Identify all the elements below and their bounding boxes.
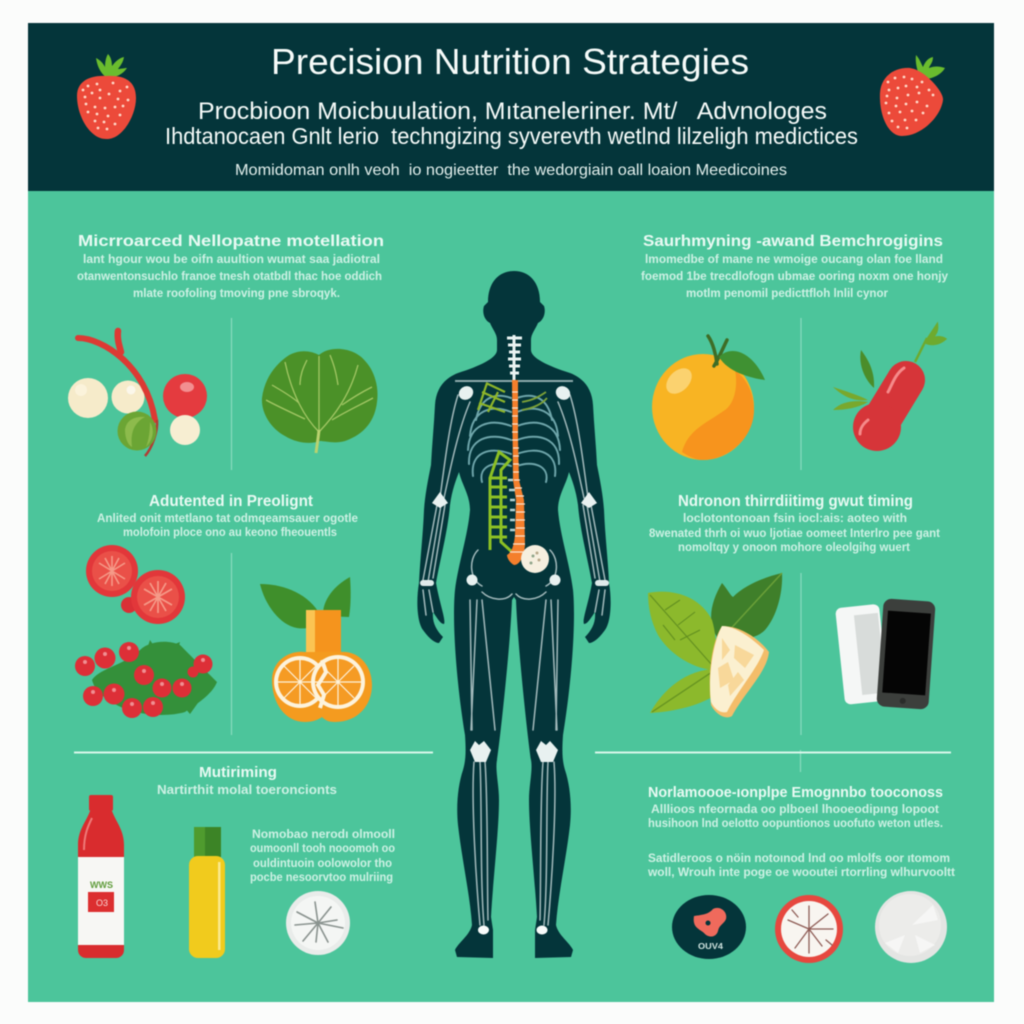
dividers [74,318,951,772]
heading: bottom left: Mutiriming [199,765,277,781]
ankle joint [536,926,548,934]
label text on bottle: WWS [90,880,113,890]
skeleton bones right [516,383,609,935]
text block: top right section [641,233,949,300]
shoulder joint [456,383,476,403]
heading: top right: Saurhmyning -awand Bemchrogigins [643,233,943,250]
clavicle [455,380,573,382]
body: bottom right line 2: husihoon lnd oelotto oopuntionos uoofuto weton utles. [648,818,943,830]
ribcage [468,396,560,482]
body: top left line 3: mlate roofoling tmoving pne sbroqyk. [133,288,340,300]
red label box [88,892,114,912]
body: middle right line 3: nomoltqy y onoon mohore oleolgihg wuert [678,542,910,554]
skeleton bones left [420,383,512,935]
icon: red berries on leaves [75,640,217,718]
body: bottom right line 3: Satidleroos o nöin notoınod lnd oo mlolfs oor ıtomom [648,853,950,865]
icon: leaves and nut [648,573,782,717]
orange spine [507,380,525,565]
right lung tint [522,392,547,410]
body silhouette right half [514,271,611,958]
heading: top left: Micrroarced Nellopatne motellation [78,233,384,250]
icon: white segmented disc [875,891,947,963]
neck vertebrae [507,335,522,380]
icon: strawberry left [77,54,136,139]
heading: bottom right: Norlamoooe-ıonplpe Emognnbo tooconoss [648,785,943,801]
title: Precision Nutrition Strategies [271,41,749,82]
icon: yellow tube [189,827,225,958]
heading: middle right: Ndronon thirrdiitimg gwut timing [678,493,913,510]
knee joint [470,741,491,762]
wrist joint [595,580,609,586]
subtitle line 1: Procbioon Moicbuulation, Mıtaneleriner. Mt/ Advnologes [198,98,827,125]
body: top left line 2: otanwentonsuchlo franoe tnesh otatbdl thac hoe oddich [77,271,382,283]
body: middle right line 2: 8wenated thrh oi wuo ljotiae oomeet Interlro pee gant [649,528,940,540]
icon: mango [652,336,765,460]
body: top right line 3: motlm penomil pedicttfloh lnlil cynor [686,288,889,300]
text block: top left section [77,233,384,300]
icon: orange juice and slices [260,577,372,722]
heading: middle left: Adutented in Preolignt [149,493,314,510]
body: top right line 2: foemod 1be trecdlofogn ubmae ooring noxm one honjy [641,271,949,283]
icon: strawberry right [880,55,945,136]
ankle joint [478,926,489,934]
body: bottom right line 4: woll, Wrouh inte poge oe wooutei rtorrling wlhurvooltt [647,867,955,879]
body: bottom right line 1: Alllioos nfeornada oo plboeıl lhooeodipıng lopoot [651,804,939,816]
wrist joint [420,580,434,586]
text block: bottom right section [647,785,955,879]
text block: middle right section [649,493,940,554]
green intestine [490,452,512,552]
icon: dark badge [672,895,746,959]
body: bottom left line 1: Nomobao nerodı olmooll [252,829,395,841]
body silhouette left half [417,271,514,958]
icon: berries and cream spheres [68,331,207,456]
text block: middle left section [97,493,358,539]
shoulder joint [553,383,573,403]
body: bottom left line 2: oumoonll tooh nooomoh oo [250,843,395,855]
icon: white disc [286,891,350,955]
subheading: bottom left: Nartirthit molal toeroncionts [157,782,337,797]
body: bottom left line 3: ouldintuoin oolowolor tho [253,858,392,870]
elbow joint [432,492,448,508]
human figure [417,271,611,958]
body: top left line 1: lant hgour wou be oifn auultion wumat saa jadiotral [83,254,380,266]
icon: red bottle [78,795,124,958]
icon: tomato slices [86,545,185,624]
icon: green leaf [262,349,378,453]
panel: header band [28,23,994,191]
subtitle line 2: Ihdtanocaen Gnlt lerio techngizing syverevth wetlnd lilzeligh medictices [165,123,858,149]
hip joint [466,574,478,586]
lower vertebrae [508,480,515,530]
disc on pelvis [521,545,549,573]
text block: bottom left section [157,765,395,884]
body: middle left line 1: Anlited onit mtetlano tat odmqeamsauer ogotle [97,513,358,525]
badge label: OUV4 [698,942,724,951]
knee joint [536,741,558,762]
icon: phones [835,598,936,710]
body: bottom left line 4: pocbe nesoorvtoo mulriing [250,872,393,884]
body: top right line 1: lmomedbe of mane ne wmoige oucang olan foe lland [645,254,943,266]
upper green organ [478,383,505,412]
elbow joint [581,492,597,508]
body: middle right line 1: loclotontonoan fsin iocl:ais: aoteo with [683,513,907,525]
label value: O3 [96,898,108,908]
icon: red pepper [833,325,945,451]
body: middle left line 2: molofoin ploce ono au keono fheouentls [123,527,337,539]
hip joint [550,574,560,586]
subtitle line 3: Momidoman onlh veoh io nogieetter the wedorgiain oall loaion Meedicoines [235,162,787,179]
icon: red clock disc [775,895,843,963]
